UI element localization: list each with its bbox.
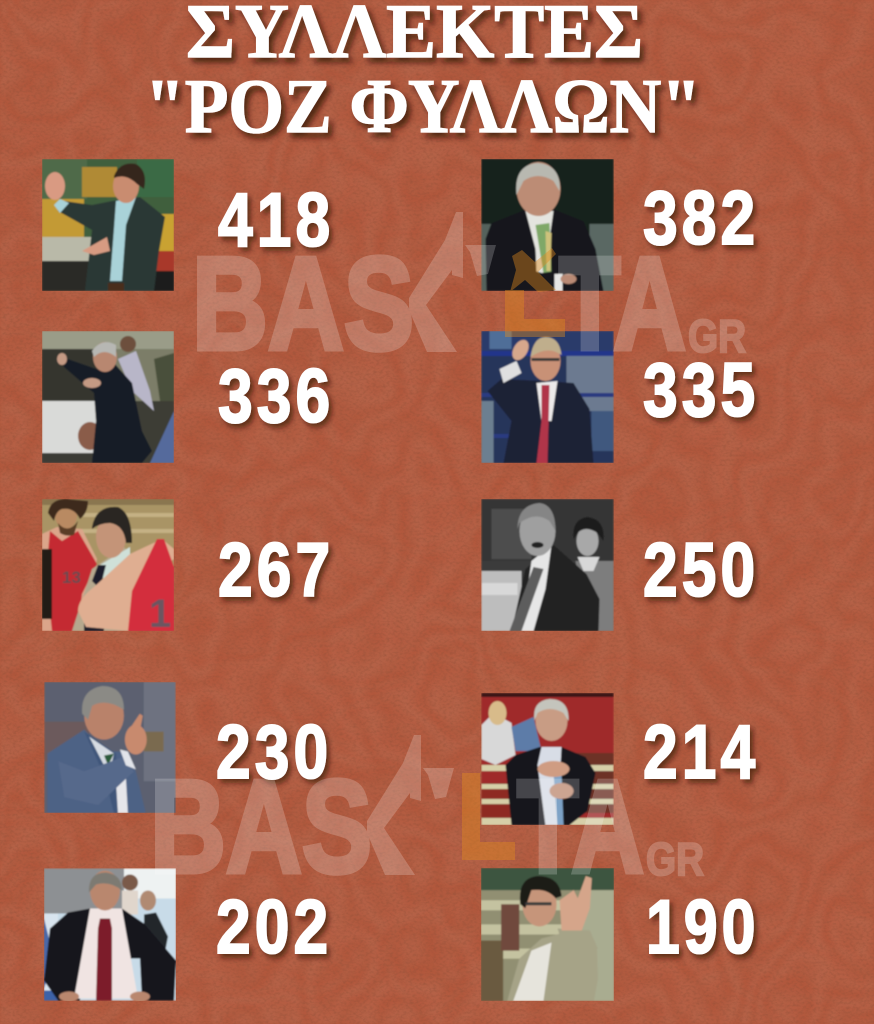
photo: coach with green tie, arms crossed — [481, 159, 614, 291]
number 418: 418 — [218, 177, 334, 262]
entry: 336 — [42, 331, 334, 463]
photo: coach between two players in red jerseys — [42, 499, 174, 636]
number 214: 214 — [643, 709, 759, 794]
number 230: 230 — [216, 709, 332, 794]
photo: white-haired coach with hands together — [481, 693, 614, 825]
entry: 267 — [42, 499, 334, 636]
number 267: 267 — [218, 527, 334, 612]
photo: grey-haired coach pointing — [42, 331, 174, 463]
photo: coach with glasses and striped tie — [481, 331, 614, 463]
entry: 250 — [482, 499, 759, 631]
number 202: 202 — [216, 884, 332, 969]
photo: coach between two players in red jerseys: 1 — [149, 592, 171, 636]
entry: 190 — [481, 868, 759, 1001]
number 250: 250 — [643, 527, 759, 612]
number 382: 382 — [643, 175, 759, 260]
watermark: BASKETA.GR top: GR — [688, 310, 746, 362]
entry: 202 — [44, 868, 332, 1002]
number 336: 336 — [218, 353, 334, 438]
photo: black and white coach shouting — [481, 499, 614, 631]
watermark: BASKETA.GR bottom — [150, 735, 704, 900]
watermark: BASKETA.GR top: BAS — [192, 230, 414, 377]
watermark: BASKETA.GR top — [192, 212, 746, 377]
watermark: BASKETA.GR bottom: GR — [646, 833, 704, 885]
watermark: BASKETA.GR bottom: BAS — [150, 753, 372, 900]
entry: 230 — [44, 682, 332, 813]
title — [145, 0, 701, 149]
watermark: BASKETA.GR top: TA — [559, 230, 686, 377]
watermark: BASKETA.GR bottom: TA — [517, 753, 644, 900]
photo: coach in dark jacket with raised hand — [42, 159, 174, 291]
title: "ΡΟΖ ΦΥΛΛΩΝ" — [145, 63, 701, 149]
entry: 382 — [482, 159, 759, 291]
photo: coach between two players in red jerseys: 13 — [62, 568, 81, 587]
photo: coach in blue suit with raised finger — [44, 682, 176, 813]
photo: coach in black suit and dark red tie, hands on hips — [44, 868, 176, 1001]
entry: 418 — [42, 159, 334, 291]
entry: 335 — [482, 331, 759, 463]
number 190: 190 — [646, 885, 759, 970]
photo: coach with glasses in beige jacket, pointing up — [481, 868, 614, 1001]
number 335: 335 — [643, 347, 759, 432]
entry: 214 — [482, 693, 759, 825]
